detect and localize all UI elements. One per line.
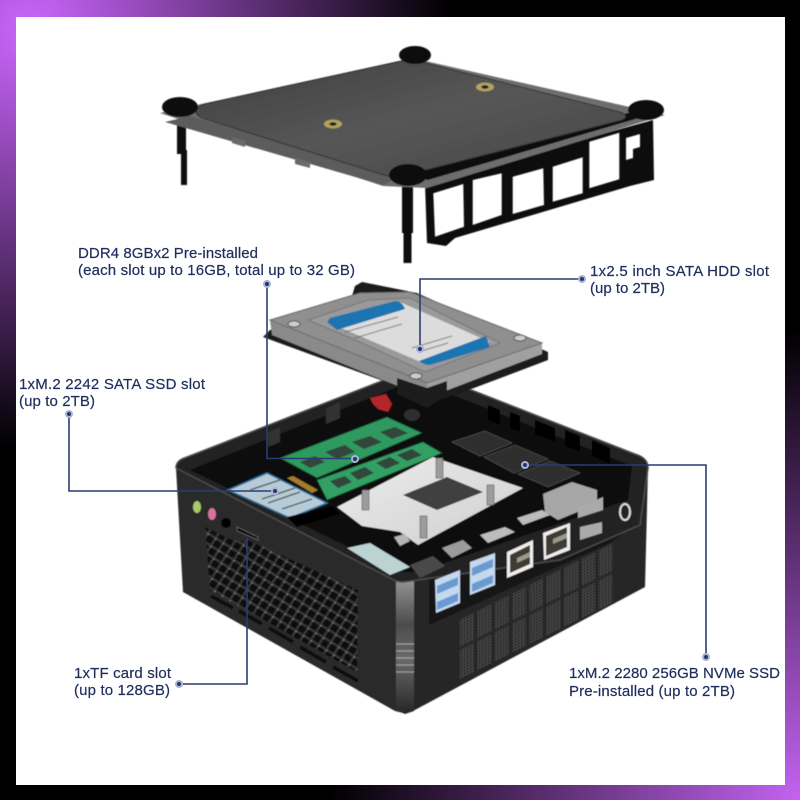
callout lines xyxy=(69,279,706,684)
left vent grille xyxy=(205,527,358,672)
callout dots xyxy=(66,276,709,687)
lid bracket assembly xyxy=(160,46,665,263)
TF card slot xyxy=(237,527,258,540)
right vent grille xyxy=(460,544,613,679)
M.2 socket gold xyxy=(287,476,318,493)
heatsink foot plate xyxy=(394,534,410,546)
TF leader xyxy=(179,538,247,684)
hdd label xyxy=(327,302,490,363)
audio jacks xyxy=(193,501,231,528)
M.2 black end xyxy=(287,506,340,527)
hdd blue bands xyxy=(327,301,490,365)
USB port stack left xyxy=(435,570,460,613)
lid I/O bracket xyxy=(425,120,654,246)
RAM chips xyxy=(300,427,422,488)
interior floor xyxy=(190,380,632,572)
RAM lower stick xyxy=(317,442,442,500)
lid front edge band xyxy=(400,113,642,180)
lid mounting tabs xyxy=(232,137,310,168)
label: TF card slot: 1xTF card slot xyxy=(74,665,172,682)
SSD 2242 leader xyxy=(69,414,275,491)
hdd label print xyxy=(345,317,452,352)
label: DDR4 memory xyxy=(78,245,355,279)
heatsink standoffs xyxy=(362,458,494,538)
right face port panel xyxy=(429,476,640,625)
ethernet ports xyxy=(507,523,570,578)
ethernet top housing xyxy=(543,482,597,520)
lid standoff pegs xyxy=(177,120,413,263)
label: M.2 2280 NVMe: 1xM.2 2280 256GB NVMe SSD xyxy=(569,665,780,682)
2.5 inch HDD and tray xyxy=(263,282,548,408)
label: TF card slot xyxy=(74,665,172,699)
USB-C port xyxy=(578,497,603,518)
label: M.2 2242 slot xyxy=(19,376,206,410)
tray xyxy=(263,282,548,408)
case top rim xyxy=(176,368,648,582)
NVMe leader xyxy=(525,465,706,657)
grey shield strips xyxy=(442,510,550,558)
tray corner block xyxy=(397,378,447,408)
power jack xyxy=(619,503,631,521)
red connector xyxy=(370,394,392,412)
label: M.2 2242 slot: (up to 2TB) xyxy=(19,393,95,410)
heatsink plate xyxy=(337,457,523,545)
lid left side band xyxy=(165,116,400,185)
HDD leader xyxy=(420,279,582,349)
rear wall openings xyxy=(488,405,610,464)
mini PC base unit xyxy=(176,368,648,714)
label: TF card slot: (up to 128GB) xyxy=(74,682,170,699)
NVMe SSD area xyxy=(452,431,580,487)
hdd recessed panel xyxy=(308,298,500,372)
CPU die xyxy=(403,477,483,510)
hdd top cover xyxy=(270,292,542,383)
hdd screws xyxy=(288,321,526,379)
label: HDD slot: 1x2.5 inch SATA HDD slot xyxy=(590,263,770,280)
M.2 2242 SATA SSD xyxy=(228,473,327,518)
label: M.2 2280 NVMe xyxy=(569,665,780,700)
label: HDD slot: (up to 2TB) xyxy=(590,280,665,297)
USB port stack right xyxy=(470,553,495,595)
SSD label barcode xyxy=(250,480,312,509)
rear wall tabs xyxy=(268,402,340,447)
RAM upper stick xyxy=(280,417,422,478)
black block xyxy=(410,556,445,578)
corner ridges xyxy=(396,644,414,672)
brass screw inserts xyxy=(324,82,494,128)
standoff screw xyxy=(404,409,420,421)
case right face xyxy=(403,468,648,713)
hdd side wall xyxy=(270,320,427,398)
DDR4 leader xyxy=(267,284,355,458)
corner highlight xyxy=(396,576,414,714)
WiFi card xyxy=(347,543,410,575)
left lower slits xyxy=(211,596,358,681)
lid top surface xyxy=(196,60,626,177)
label: M.2 2242 slot: 1xM.2 2242 SATA SSD slot xyxy=(19,376,206,393)
rubber feet xyxy=(162,46,664,186)
label: DDR4 memory: DDR4 8GBx2 Pre-installed xyxy=(78,245,258,262)
case left face xyxy=(176,468,403,713)
label: DDR4 memory: (each slot up to 16GB, total up to 32 GB) xyxy=(78,262,355,279)
lid bottom plate xyxy=(160,58,665,188)
label: M.2 2280 NVMe: Pre-installed (up to 2TB) xyxy=(569,683,735,700)
HDMI port xyxy=(580,522,602,540)
label: HDD slot xyxy=(590,263,770,297)
